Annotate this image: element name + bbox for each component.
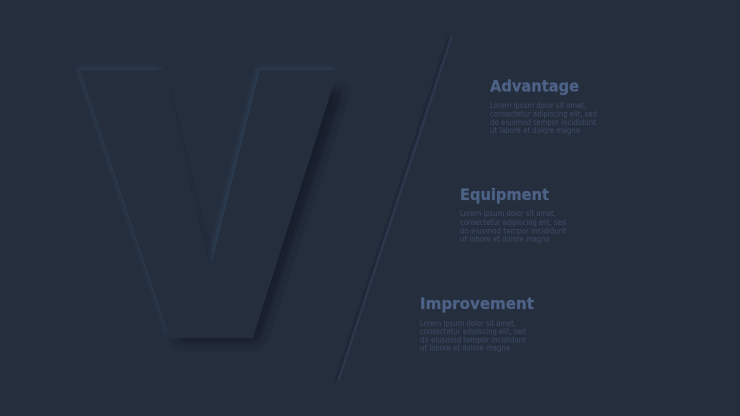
body: Advantage: consectetur adipiscing elit, sed: [490, 110, 597, 118]
text block: Advantage: [490, 76, 599, 135]
body: Advantage: do eiusmod tempor incididunt: [490, 118, 596, 127]
letter V emboss: [78, 68, 344, 343]
body: Equipment: Lorem ipsum dolor sit amet,: [460, 209, 556, 218]
diagonal slash divider: [336, 37, 452, 380]
body: Improvement: Lorem ipsum dolor sit amet,: [420, 319, 516, 328]
body: Improvement: ut labore et dolore magna: [420, 344, 510, 352]
body: Improvement: do eiusmod tempor incididunt: [420, 336, 526, 344]
text block: Improvement: [420, 294, 534, 352]
body: Advantage: ut labore et dolore magna: [490, 126, 580, 135]
heading: Equipment: Equipment: [460, 185, 549, 204]
body: Improvement: consectetur adipiscing elit, sed: [420, 327, 526, 336]
body: Advantage: Lorem ipsum dolor sit amet,: [490, 101, 586, 110]
heading: Advantage: Advantage: [490, 76, 579, 96]
body: Equipment: ut labore et dolore magna: [460, 234, 550, 244]
heading: Improvement: Improvement: [420, 294, 534, 313]
body: Equipment: consectetur adipiscing elit, sed: [460, 218, 566, 227]
body: Equipment: do eiusmod tempor incididunt: [460, 226, 566, 236]
text block: Equipment: [460, 185, 568, 244]
